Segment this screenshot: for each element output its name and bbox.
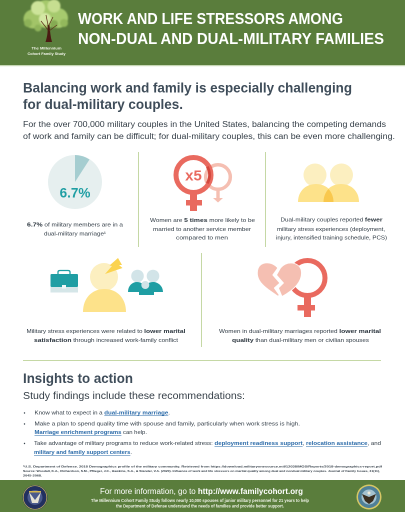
insights subheading: Study findings include these recommendations: [23,390,245,402]
header banner [0,0,405,66]
caption [26,329,186,344]
footer description [91,498,309,508]
recommendations list: military and family support centers . [34,450,132,456]
footnotes: ¹U.S. Department of Defense. 2018 Demographics profile of the military community. Retrieved from https://download.militaryonesource.mil/12038/MOS/Reports/2018-demographics-report.pdf [23,464,383,468]
icon: briefcase [50,270,78,292]
footer description: The Millennium Cohort Family Study follows nearly 10,000 spouses of junior military personnel for 21 years to help [91,498,309,503]
logo text: Cohort Family Study [28,52,66,56]
caption: Women are 5 times more likely to be [150,218,255,224]
logo text: The Millennium [32,46,62,50]
footer banner [0,480,405,512]
icon: stressed person with lightning [83,258,126,312]
caption: military stress experiences (deployment, [277,227,385,233]
title: WORK AND LIFE STRESSORS AMONG [78,11,343,28]
title [78,11,384,48]
recommendations list: Marriage enrichment programs can help. [34,430,147,436]
footnotes: Source: Woodall, K.A., Richardson, S.M., Pflieger, J.C., Hawkins, S.A., & Stander, V.A. (2020). Influence of work and life stressors on marital quality among dual and nondual military couples. Journal of Family Issues, 41(11), [23,469,380,473]
recommendations list: Know what to expect in a dual-military marriage . [34,410,170,416]
caption: satisfaction through increased work-family conflict [34,338,179,344]
icon: broken heart and female symbol [258,260,325,317]
caption: quality than dual-military men or civilian spouses [232,338,369,344]
panel: fewer stress experiences [276,164,387,242]
divider [265,152,266,247]
heading: for dual-military couples. [23,96,183,112]
icon: family [128,270,163,295]
panel: lower marital satisfaction [26,258,186,344]
caption: injury, intensified training schedule, PCS) [276,236,387,242]
caption [276,218,387,242]
caption [150,218,255,242]
intro paragraph: of work and family can be difficult; for dual-military couples, this can be even more challenging. [23,132,395,141]
footnotes: 2045-2068. [23,474,42,478]
recommendations list: Make a plan to spend quality time with spouse and family, particularly when work stress is high. [34,422,300,428]
icon: right seal [356,484,382,510]
icon: female and male symbols x5: x5 [185,168,202,184]
panel: 6.7% of military members [27,155,123,238]
heading [23,80,352,112]
divider [138,152,139,247]
icon: two people [298,164,359,202]
caption: Women in dual-military marriages reported lower marital [219,329,382,335]
call to action: For more information, go to http://www.familycohort.org [100,487,303,496]
divider [23,360,381,361]
panel: women 5 times [150,158,255,242]
caption [27,222,123,238]
insights heading: Insights to action [23,371,133,386]
caption: compared to men [176,236,228,242]
logo text [28,46,66,56]
caption: Military stress experiences were related to lower marital [26,329,186,335]
pie chart: 6.7%: 6.7% [60,186,90,200]
heading: Balancing work and family is especially challenging [23,80,352,96]
caption: dual-military marriage¹ [44,232,106,238]
intro paragraph [23,120,395,141]
recommendations list [24,410,381,456]
title: NON-DUAL AND DUAL-MILITARY FAMILIES [78,31,384,48]
panel: lower marital quality [219,260,382,344]
caption: Dual-military couples reported fewer [280,218,383,224]
caption [219,329,382,344]
caption: married to another service member [153,227,251,233]
caption: 6.7% of military members are in a [27,222,123,228]
intro paragraph: For the over 700,000 military couples in the United States, balancing the competing demands [23,120,386,129]
icon: left seal [22,485,48,510]
recommendations list: Take advantage of military programs to reduce work-related stress: deployment readiness support , relocation assistance , and [34,441,381,447]
divider [201,253,202,347]
footer description: the Department of Defense understand the needs of families and provide better support. [116,504,284,508]
icon: Millennium Cohort Family Study tree logo [24,0,68,42]
footnotes [23,464,383,478]
